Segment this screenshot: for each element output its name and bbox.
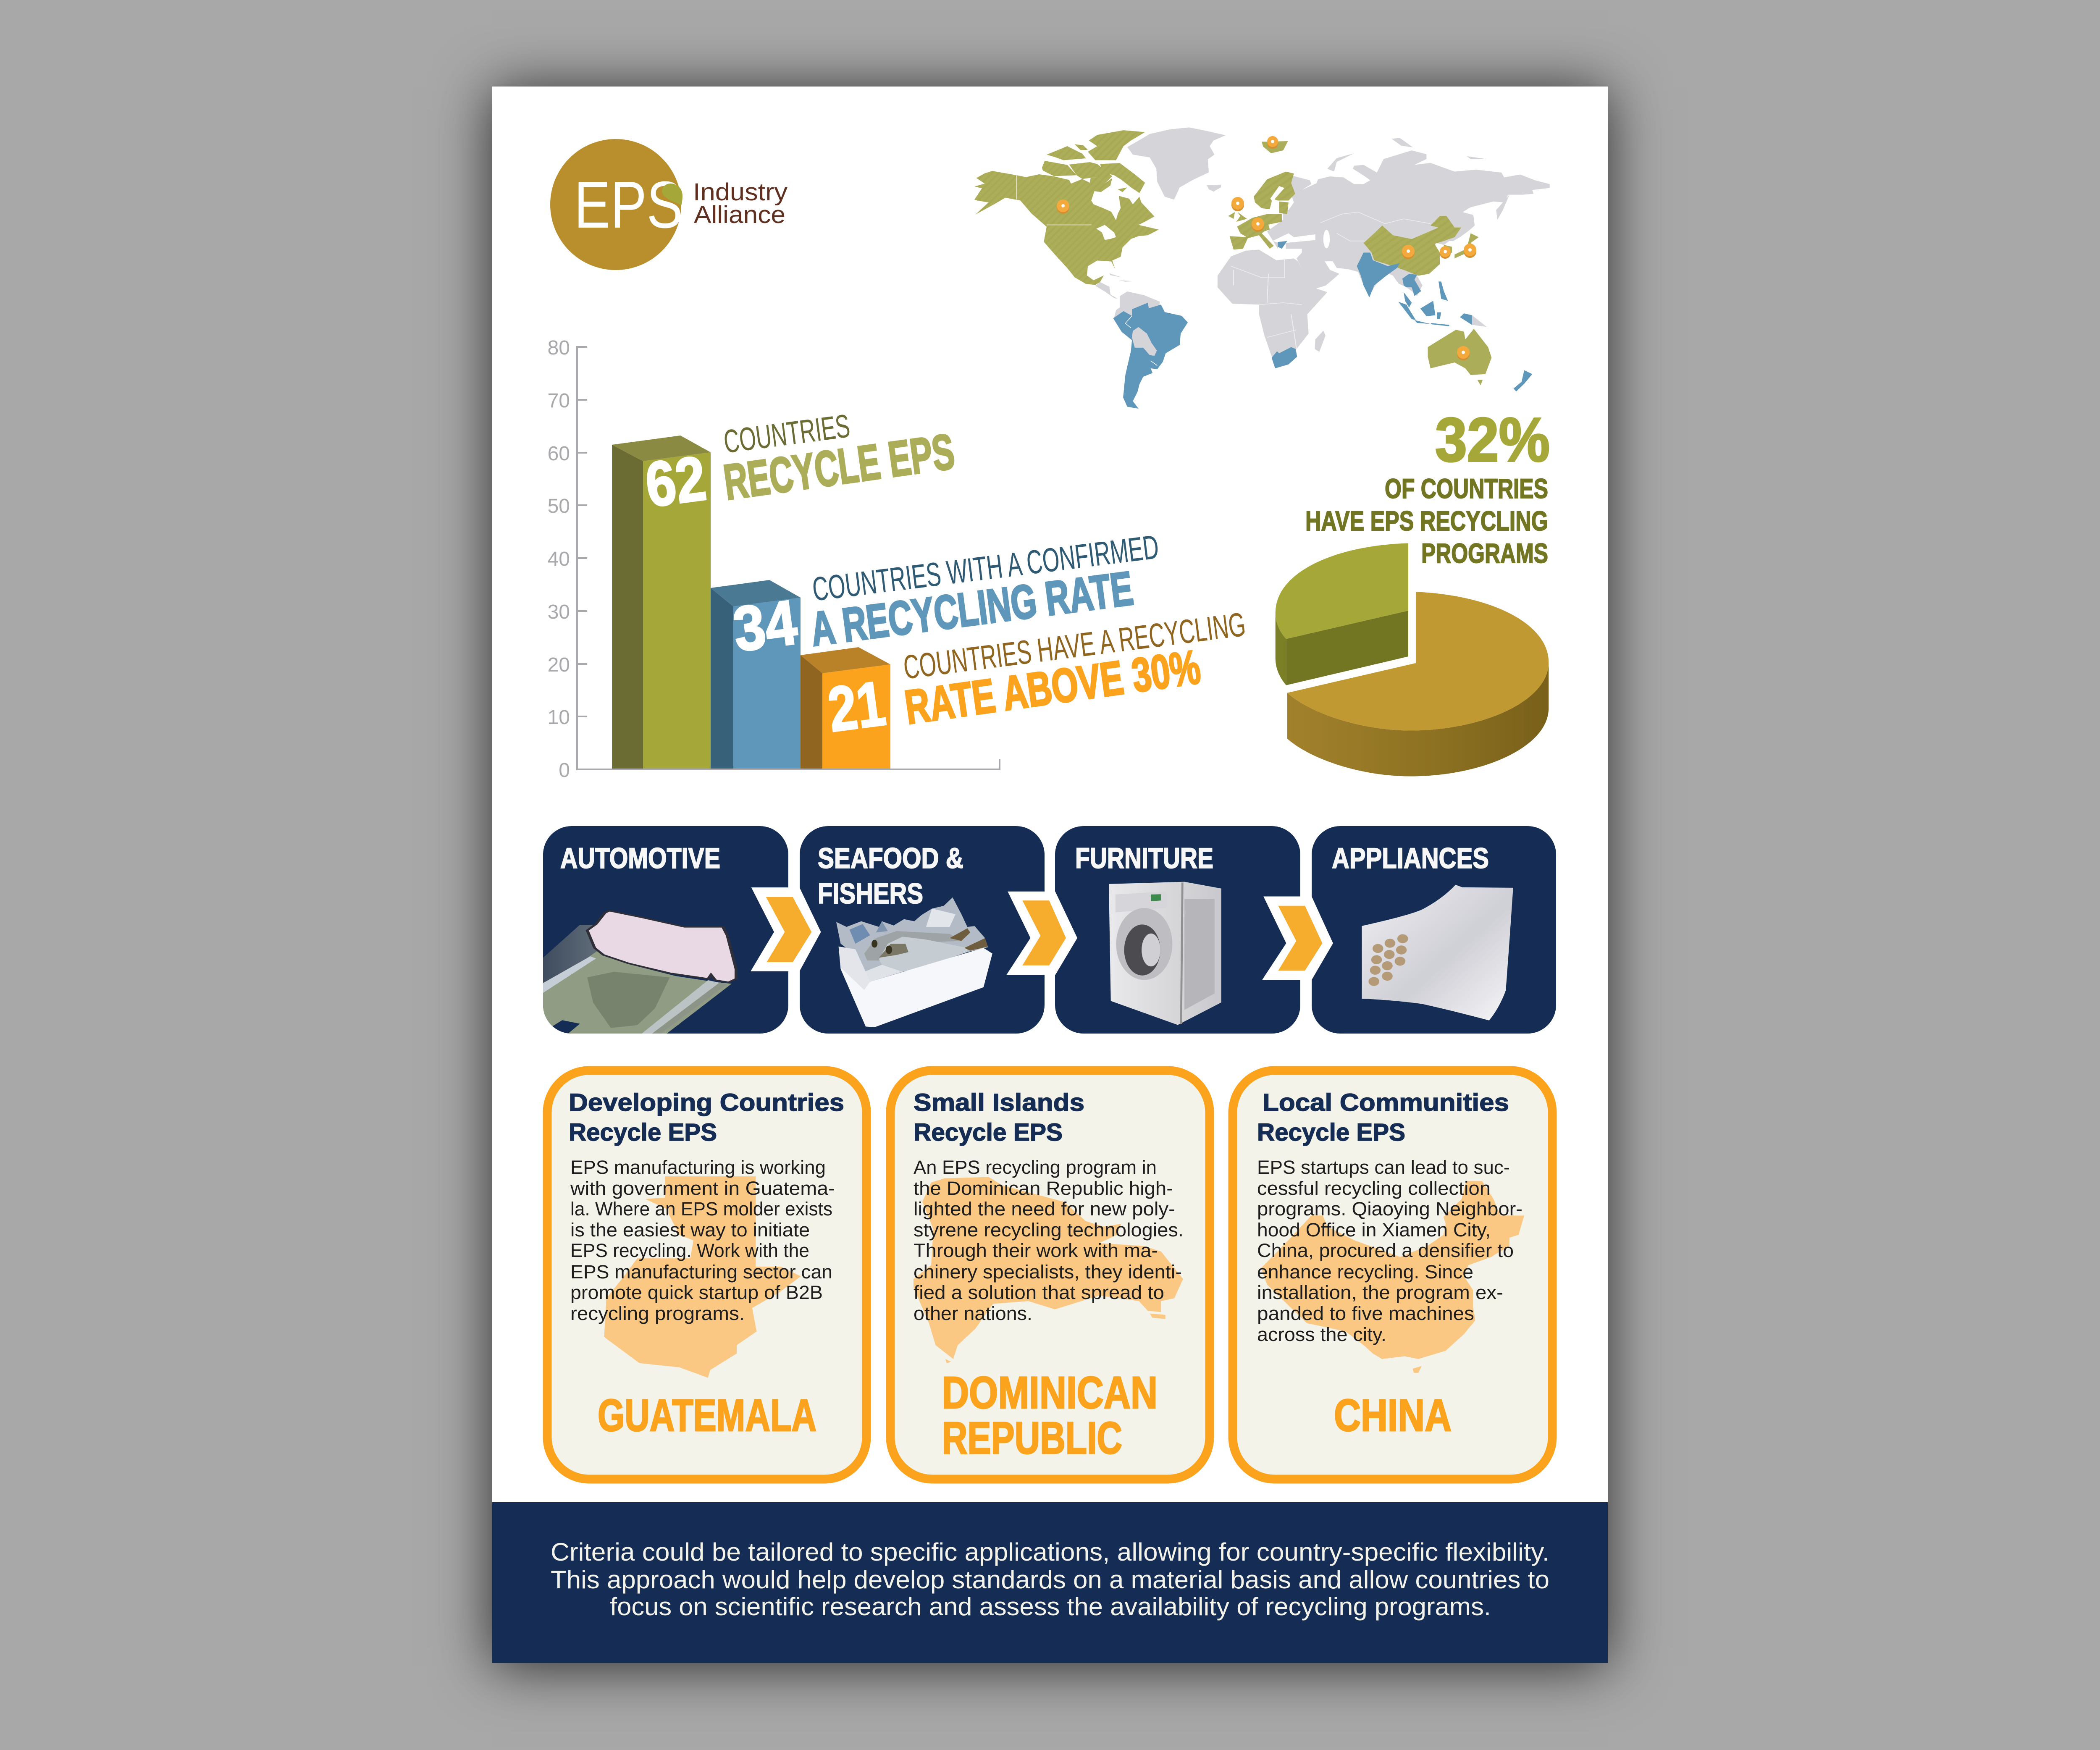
map: location pins xyxy=(1057,136,1476,360)
chart axis and tick labels: 30 xyxy=(548,601,570,623)
chart axis and tick labels: 50 xyxy=(548,495,570,517)
label: countries have a recycling rate above 30%: COUNTRIES HAVE A RECYCLING xyxy=(901,605,1248,686)
footer text: focus on scientific research and assess the availability of recycling programs. xyxy=(610,1593,1491,1621)
country name: China: CHINA xyxy=(1334,1390,1452,1440)
chart axis and tick labels: 80 xyxy=(548,337,570,359)
32% statistic: PROGRAMS xyxy=(1421,538,1548,569)
footer band xyxy=(492,1502,1608,1663)
body text: Dominican Republic xyxy=(914,1157,1184,1324)
bar: 21 countries: 21 xyxy=(824,668,889,745)
logo: EPS Industry Alliance: Industry xyxy=(693,178,788,206)
body text: China: panded to five machines xyxy=(1257,1303,1474,1324)
map silhouette: Guatemala xyxy=(604,1176,801,1378)
label: furniture: FURNITURE xyxy=(1075,842,1213,874)
label: countries with a confirmed recycling rate: A RECYCLING RATE xyxy=(808,561,1136,656)
heading: local communities: Recycle EPS xyxy=(1257,1119,1405,1146)
body text: Dominican Republic: other nations. xyxy=(914,1303,1032,1324)
heading: small islands: Recycle EPS xyxy=(914,1119,1063,1146)
bar: 62 countries: 62 xyxy=(641,443,710,520)
arrow: seafood to furniture xyxy=(1006,892,1077,975)
chart axis and tick labels: 40 xyxy=(548,548,570,570)
label: countries with a confirmed recycling rate: COUNTRIES WITH A CONFIRMED xyxy=(810,528,1161,608)
bar chart xyxy=(548,337,1248,782)
body text: Guatemala: la. Where an EPS molder exists xyxy=(570,1198,832,1220)
body text: Guatemala xyxy=(570,1157,835,1324)
logo: EPS Industry Alliance: Alliance xyxy=(694,201,785,228)
body text: Guatemala: is the easiest way to initiate xyxy=(570,1219,810,1241)
body text: China: enhance recycling. Since xyxy=(1257,1261,1473,1283)
32% statistic xyxy=(1305,405,1550,569)
panels: applications xyxy=(543,826,1556,1034)
chart axis and tick labels: 20 xyxy=(548,654,570,676)
arrow: automotive to seafood xyxy=(751,887,821,971)
footer text: This approach would help develop standards on a material basis and allow countries to xyxy=(551,1566,1549,1594)
body text: China: China, procured a densifier to xyxy=(1257,1240,1514,1261)
body text: Dominican Republic: fied a solution that spread to xyxy=(914,1282,1164,1303)
label: countries recycle EPS xyxy=(720,407,958,511)
country name: Dominican Republic: REPUBLIC xyxy=(942,1412,1122,1463)
icon: box of fish xyxy=(836,897,992,1027)
heading: small islands xyxy=(914,1089,1084,1146)
footer text: Criteria could be tailored to specific applications, allowing for country-specific flexibility. xyxy=(551,1538,1549,1566)
panel: automotive xyxy=(543,826,788,1034)
body text: Dominican Republic: An EPS recycling program in xyxy=(914,1157,1157,1178)
label: countries with a confirmed recycling rate xyxy=(808,528,1161,656)
heading: developing countries xyxy=(569,1089,844,1146)
body text: Dominican Republic: the Dominican Republic high- xyxy=(914,1178,1173,1199)
body text: China: EPS startups can lead to suc- xyxy=(1257,1157,1510,1178)
country name: Guatemala: GUATEMALA xyxy=(598,1390,816,1440)
heading: developing countries: Recycle EPS xyxy=(569,1119,717,1146)
body text: China: hood Office in Xiamen City, xyxy=(1257,1219,1491,1241)
logo: EPS Industry Alliance xyxy=(550,139,788,270)
bar: 34 countries: 34 xyxy=(729,587,801,665)
body text: China: installation, the program ex- xyxy=(1257,1282,1503,1303)
label: automotive: AUTOMOTIVE xyxy=(560,842,720,874)
body text: Guatemala: EPS manufacturing sector can xyxy=(570,1261,832,1283)
icon: washing machine xyxy=(1109,882,1221,1025)
bar: 34 countries xyxy=(711,580,801,769)
icon: automotive foam-filled steel beam xyxy=(543,911,736,1034)
map silhouette: China xyxy=(1261,1181,1524,1373)
chart axis and tick labels: 70 xyxy=(548,390,570,412)
chart axis and tick labels: 10 xyxy=(548,706,570,729)
body text: Dominican Republic: styrene recycling technologies. xyxy=(914,1219,1184,1241)
label: countries recycle EPS: RECYCLE EPS xyxy=(720,423,958,511)
body text: China: programs. Qiaoying Neighbor- xyxy=(1257,1198,1522,1220)
card: local communities, China xyxy=(1233,1070,1552,1479)
map: Europe, Africa, Asia and Oceania xyxy=(1207,138,1550,391)
body text: Guatemala: EPS manufacturing is working xyxy=(570,1157,826,1178)
32% statistic: 32% xyxy=(1435,405,1550,475)
body text: Guatemala: promote quick startup of B2B xyxy=(570,1282,823,1303)
footer text xyxy=(551,1538,1549,1621)
logo: EPS Industry Alliance: EPS xyxy=(574,168,683,242)
body text: China: cessful recycling collection xyxy=(1257,1178,1491,1199)
heading: local communities xyxy=(1257,1089,1509,1146)
32% statistic: OF COUNTRIES xyxy=(1385,473,1548,504)
32% statistic: HAVE EPS RECYCLING xyxy=(1305,505,1548,536)
panel: appliances xyxy=(1312,826,1556,1034)
icon: white EPS foam part xyxy=(1362,885,1513,1021)
body text: China: across the city. xyxy=(1257,1324,1386,1345)
body text: Guatemala: with government in Guatema- xyxy=(570,1178,835,1199)
chart axis and tick labels: 60 xyxy=(548,443,570,465)
chart axis and tick labels: 0 xyxy=(559,759,570,782)
card: developing countries, Guatemala xyxy=(547,1070,866,1479)
heading: local communities: Local Communities xyxy=(1263,1089,1509,1116)
heading: developing countries: Developing Countries xyxy=(569,1089,844,1116)
label: seafood and fishers xyxy=(818,842,963,910)
chart axis and tick labels xyxy=(548,337,1000,782)
bar: 62 countries xyxy=(612,436,711,769)
country name: Dominican Republic xyxy=(942,1367,1158,1463)
label: countries have a recycling rate above 30%: RATE ABOVE 30% xyxy=(902,640,1204,735)
body text: Dominican Republic: chinery specialists, they identi- xyxy=(914,1261,1182,1283)
bar: 21 countries xyxy=(801,647,890,769)
heading: small islands: Small Islands xyxy=(914,1089,1084,1116)
3D pie chart xyxy=(1276,543,1549,777)
label: seafood and fishers: SEAFOOD & xyxy=(818,842,963,874)
label: countries recycle EPS: COUNTRIES xyxy=(722,407,852,460)
panel: furniture xyxy=(1055,826,1300,1034)
map silhouette: Dominican Republic xyxy=(914,1177,1183,1363)
body text: Guatemala: recycling programs. xyxy=(570,1303,745,1324)
body text: Dominican Republic: Through their work with ma- xyxy=(914,1240,1158,1261)
world map xyxy=(974,127,1550,409)
card: small islands, Dominican Republic xyxy=(890,1070,1210,1479)
white page sheet with shadow xyxy=(492,87,1608,1663)
body text: Dominican Republic: lighted the need for new poly- xyxy=(914,1198,1175,1220)
panel: seafood and fishers xyxy=(800,826,1045,1034)
label: seafood and fishers: FISHERS xyxy=(818,877,923,910)
body text: China xyxy=(1257,1157,1522,1345)
country name: Dominican Republic: DOMINICAN xyxy=(942,1367,1158,1418)
arrow: furniture to appliances xyxy=(1262,897,1333,980)
map: Americas and Greenland xyxy=(974,127,1226,409)
label: appliances: APPLIANCES xyxy=(1332,842,1489,874)
body text: Guatemala: EPS recycling. Work with the xyxy=(570,1240,809,1261)
